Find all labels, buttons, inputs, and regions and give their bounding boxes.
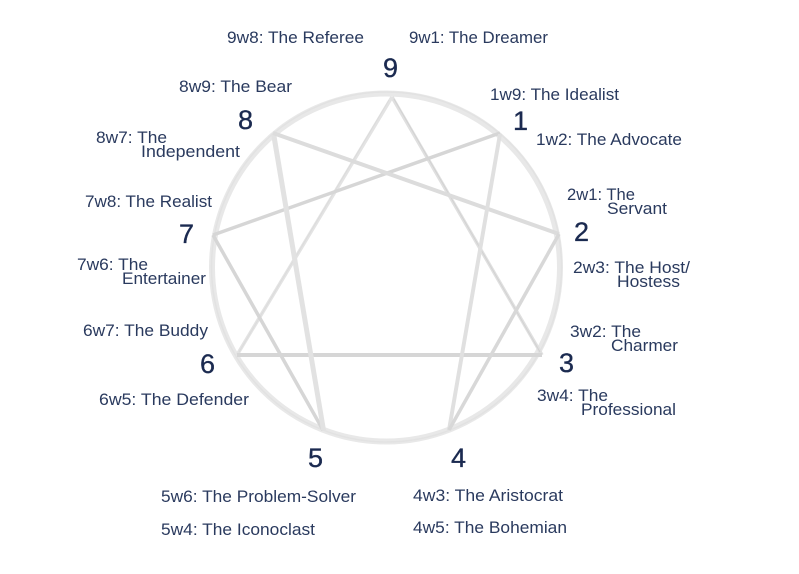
label 8w7: 8w7: The [96,129,167,147]
label 7w6 [77,256,207,288]
enneagram hexad [213,133,559,430]
label 3w2: 3w2: The [570,323,641,341]
label 2w3: Hostess [617,273,680,291]
label 1w2: 1w2: The Advocate [536,131,682,149]
label 8w7: Independent [141,143,240,161]
number 4: 4 [451,443,466,473]
number 8: 8 [238,105,253,135]
number 3: 3 [559,348,574,378]
label 2w1 [567,186,667,218]
label 3w2: Charmer [611,337,679,355]
label 2w1: 2w1: The [567,186,635,204]
label 3w4: 3w4: The [537,387,608,405]
label 4w3: 4w3: The Aristocrat [413,487,563,505]
label 6w5: 6w5: The Defender [99,391,250,409]
label 8w9: 8w9: The Bear [179,78,293,96]
label 2w1: Servant [607,200,667,218]
label 7w8: 7w8: The Realist [85,193,212,211]
label 3w2 [570,323,679,355]
number 1: 1 [513,106,528,136]
number 2: 2 [574,217,589,247]
label 2w3 [573,259,690,291]
label 7w6: 7w6: The [77,256,148,274]
enneagram circle [212,92,562,442]
label 2w3: 2w3: The Host/ [573,259,690,277]
label 5w4: 5w4: The Iconoclast [161,521,315,539]
label 6w7: 6w7: The Buddy [83,322,209,340]
label 7w6: Entertainer [122,270,207,288]
enneagram triangle [237,97,542,355]
label 5w6: 5w6: The Problem-Solver [161,488,357,506]
label 3w4 [537,387,676,419]
number 6: 6 [200,349,215,379]
number 7: 7 [179,219,194,249]
label 8w7 [96,129,240,161]
label 1w9: 1w9: The Idealist [490,86,619,104]
label 9w8: 9w8: The Referee [227,29,364,47]
number 9: 9 [383,53,398,83]
label 4w5: 4w5: The Bohemian [413,519,567,537]
label 9w1: 9w1: The Dreamer [409,29,549,47]
label 3w4: Professional [581,401,676,419]
number 5: 5 [308,443,323,473]
